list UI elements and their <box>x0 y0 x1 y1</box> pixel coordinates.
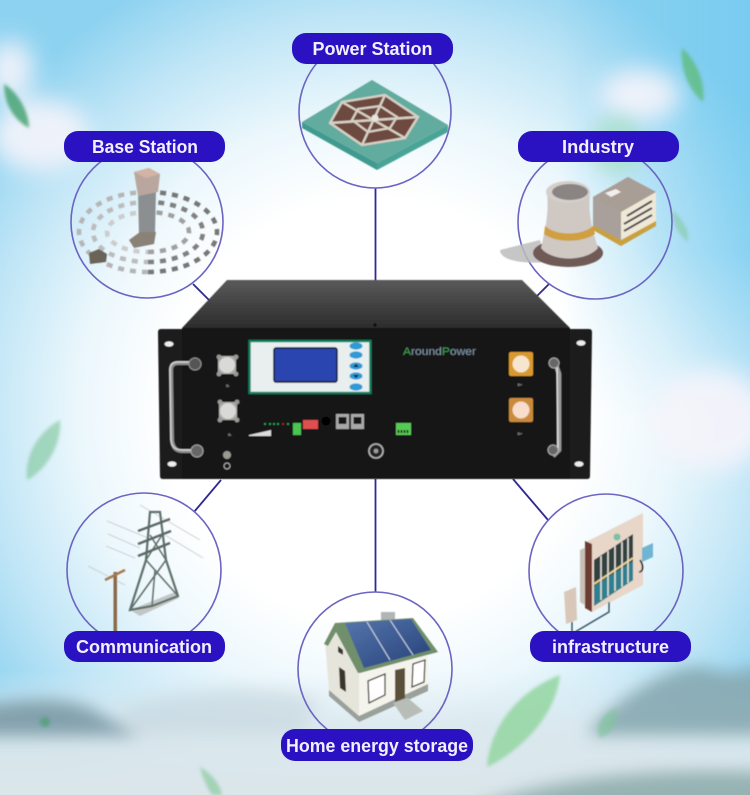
label: Home energy storage: Home energy storage <box>286 736 468 756</box>
label: infrastructure <box>530 631 691 662</box>
connector terminals: B- <box>226 383 231 388</box>
icon: transmission tower <box>88 505 203 632</box>
connector lines <box>193 188 549 592</box>
handle left <box>170 358 203 457</box>
label: infrastructure: infrastructure <box>552 637 669 657</box>
label: Industry: Industry <box>562 137 634 157</box>
connector terminals: B+ <box>517 382 523 387</box>
label: Base Station: Base Station <box>92 137 198 157</box>
front panel <box>182 328 570 479</box>
handle right <box>548 358 559 456</box>
icon: heliostat tower <box>79 168 217 272</box>
label: Power Station: Power Station <box>312 39 432 59</box>
icon: solar tower field <box>302 80 448 170</box>
battery unit <box>158 280 592 479</box>
top cover <box>182 280 570 328</box>
panel: infrastructure <box>529 494 691 662</box>
panel: Power Station <box>292 33 453 188</box>
label: Power Station <box>292 33 453 64</box>
icon: energy cabinet <box>564 513 653 632</box>
icon: solar house <box>324 612 438 722</box>
misty hills <box>0 664 750 795</box>
label: Home energy storage <box>281 729 473 761</box>
connector terminals <box>217 352 533 437</box>
panel: Base Station <box>64 131 225 298</box>
control ports <box>223 414 411 469</box>
icon: cooling tower and factory <box>500 177 656 267</box>
logo: AroundPower <box>403 346 476 358</box>
panel: Communication <box>64 493 225 662</box>
clouds <box>0 40 750 470</box>
label: Communication: Communication <box>76 637 212 657</box>
label: Industry <box>518 131 679 162</box>
label: Communication <box>64 631 225 662</box>
panel: Industry <box>500 131 679 299</box>
rack ears <box>158 329 183 479</box>
connector terminals: B- <box>228 432 233 437</box>
display panel <box>250 341 370 393</box>
label: Base Station <box>64 131 225 162</box>
connector terminals: B+ <box>517 431 523 436</box>
panel: Home energy storage <box>281 592 473 761</box>
